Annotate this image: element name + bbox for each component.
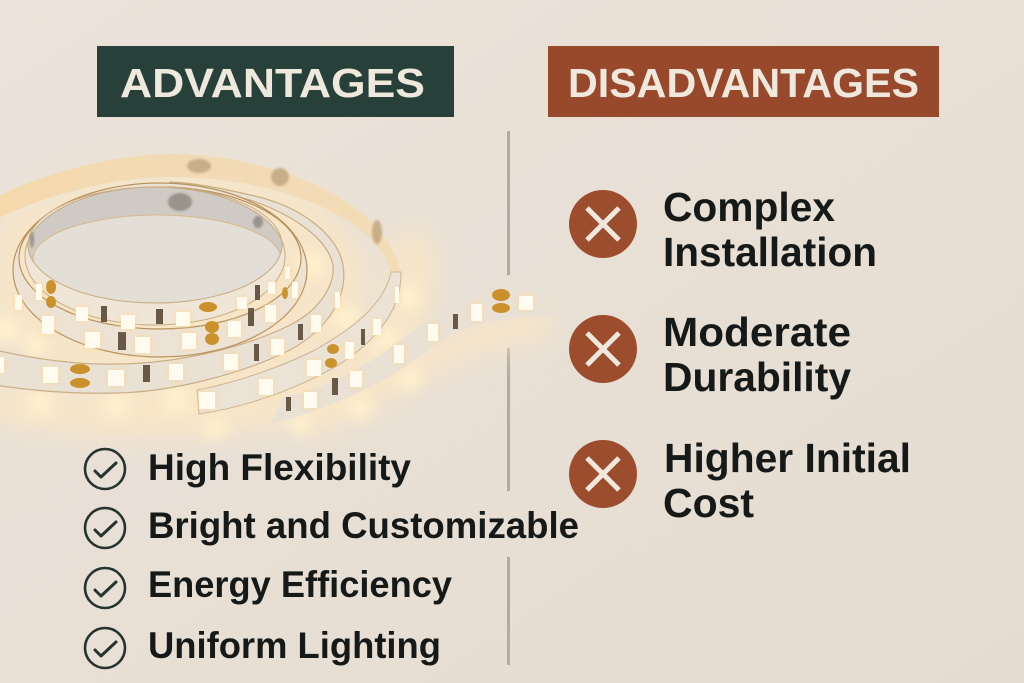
heading: disadvantages: DISADVANTAGES (568, 60, 919, 106)
disadvantage item: Moderate Durability: Moderate (663, 309, 851, 355)
disadvantage item: Complex Installation (569, 184, 877, 275)
heading: advantages: ADVANTAGES (120, 60, 425, 106)
outer band (0, 154, 401, 414)
second strip (13, 183, 307, 357)
disadvantage item: Higher Initial Cost (569, 435, 911, 526)
inner strip (25, 187, 285, 325)
icon: cross (569, 440, 637, 508)
disadvantage item: Complex Installation: Complex (663, 184, 835, 230)
tail strip (272, 288, 578, 423)
disadvantage item: Higher Initial Cost: Cost (663, 480, 754, 526)
advantage item: Uniform Lighting: Uniform Lighting (148, 625, 441, 666)
heading: advantages (97, 46, 454, 117)
icon: check (85, 449, 125, 489)
heading: disadvantages (548, 46, 939, 117)
advantage item: Bright and Customizable: Bright and Customizable (148, 505, 579, 546)
icon: check (85, 628, 125, 668)
icon: check (85, 508, 125, 548)
disadvantage item: Complex Installation: Installation (663, 229, 877, 275)
adhesive marks (187, 159, 382, 244)
gold solder pads (46, 280, 510, 388)
LED chips (0, 267, 533, 409)
illustration: glowing LED strip (0, 154, 578, 440)
advantage item: High Flexibility: High Flexibility (148, 447, 411, 488)
icon: cross (569, 190, 637, 258)
dark chips (101, 285, 458, 411)
adhesive on inner ring (30, 193, 263, 248)
icon: check (85, 568, 125, 608)
LED halo (0, 267, 533, 409)
disadvantage item: Moderate Durability (569, 309, 851, 400)
icon: cross (569, 315, 637, 383)
disadvantage item: Moderate Durability: Durability (663, 354, 851, 400)
third strip (0, 182, 344, 393)
advantage item: Energy Efficiency: Energy Efficiency (148, 564, 452, 605)
divider line (507, 131, 510, 665)
inner ring wall (28, 187, 282, 303)
inner floor (33, 215, 281, 303)
outer strip, front (197, 272, 401, 414)
disadvantage item: Higher Initial Cost: Higher Initial (664, 435, 911, 481)
